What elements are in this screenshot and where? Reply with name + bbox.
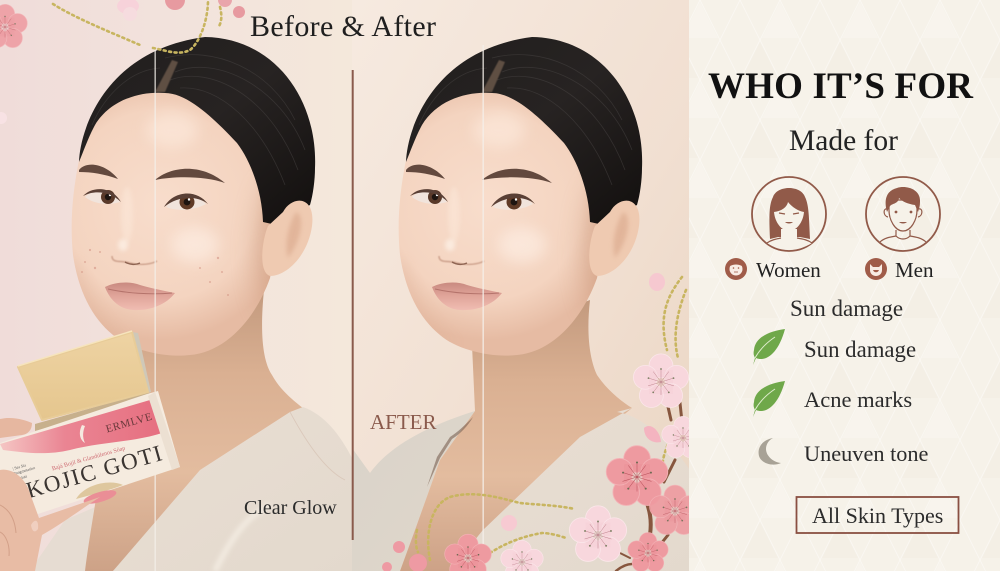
icon: man portrait — [866, 177, 940, 251]
gold seal — [76, 483, 123, 499]
label: Men — [865, 258, 934, 282]
list item: Sun damage — [753, 329, 916, 365]
product name: KOJIC GOTI — [23, 440, 165, 503]
hand: fingers — [0, 470, 100, 571]
badge: All Skin Types: All Skin Types — [812, 503, 943, 528]
subheading: Sun damage: Sun damage — [790, 296, 903, 321]
caption: Clear Glow: Clear Glow — [244, 497, 337, 519]
icon: woman portrait — [752, 177, 826, 251]
before: head — [70, 37, 315, 356]
after: dress right — [450, 408, 690, 571]
before: neck and chest — [85, 290, 303, 571]
before portrait — [30, 37, 352, 571]
caption: AFTER: AFTER — [370, 410, 437, 434]
before: dress right — [113, 407, 352, 571]
side note: Soluti — [17, 473, 28, 481]
hand: thumb — [0, 418, 32, 438]
subtitle: Bajá Bojil & Glandúlenos Sóap — [51, 446, 126, 472]
soap box — [0, 391, 180, 520]
center divider — [352, 70, 354, 540]
label: Women: Women — [756, 258, 821, 282]
brand text: ERMLVE — [105, 411, 154, 435]
before divider line — [154, 48, 156, 571]
badge: All Skin Types — [796, 497, 958, 533]
before: blemishes — [81, 249, 229, 296]
side note: Pangmutation — [13, 465, 36, 476]
subheading: Made for: Made for — [789, 125, 898, 157]
after: neck and chest — [400, 300, 632, 571]
heading: Before & After: Before & After — [250, 10, 436, 43]
side note: | Sea Sia — [12, 462, 27, 471]
background: before and after panels — [0, 0, 690, 571]
list item: Uneuven tone — [759, 438, 929, 466]
box emblem — [80, 425, 85, 443]
after: dress left — [352, 411, 475, 571]
list item: Sun damage: Sun damage — [804, 337, 916, 362]
after divider line — [482, 45, 484, 560]
soap bar — [18, 331, 152, 431]
after portrait — [352, 37, 690, 571]
decoration: gold vine over parting — [53, 0, 221, 53]
label: Men: Men — [895, 258, 934, 282]
label: Women — [725, 258, 821, 282]
before: dress left — [35, 508, 94, 571]
gold vines — [416, 277, 686, 560]
side note — [12, 462, 36, 481]
product: soap and box held in hand — [0, 331, 180, 571]
list item: Acne marks: Acne marks — [804, 387, 912, 412]
after: head — [397, 37, 642, 356]
decoration: top-left blossoms — [0, 0, 245, 124]
branches — [610, 398, 682, 571]
list item: Acne marks — [753, 381, 912, 417]
heading: WHO IT'S FOR: WHO IT’S FOR — [708, 66, 974, 107]
list item: Uneuven tone: Uneuven tone — [804, 441, 929, 466]
decoration: lower-right blossom branch — [382, 273, 704, 571]
panel: who it's for — [689, 0, 1000, 571]
